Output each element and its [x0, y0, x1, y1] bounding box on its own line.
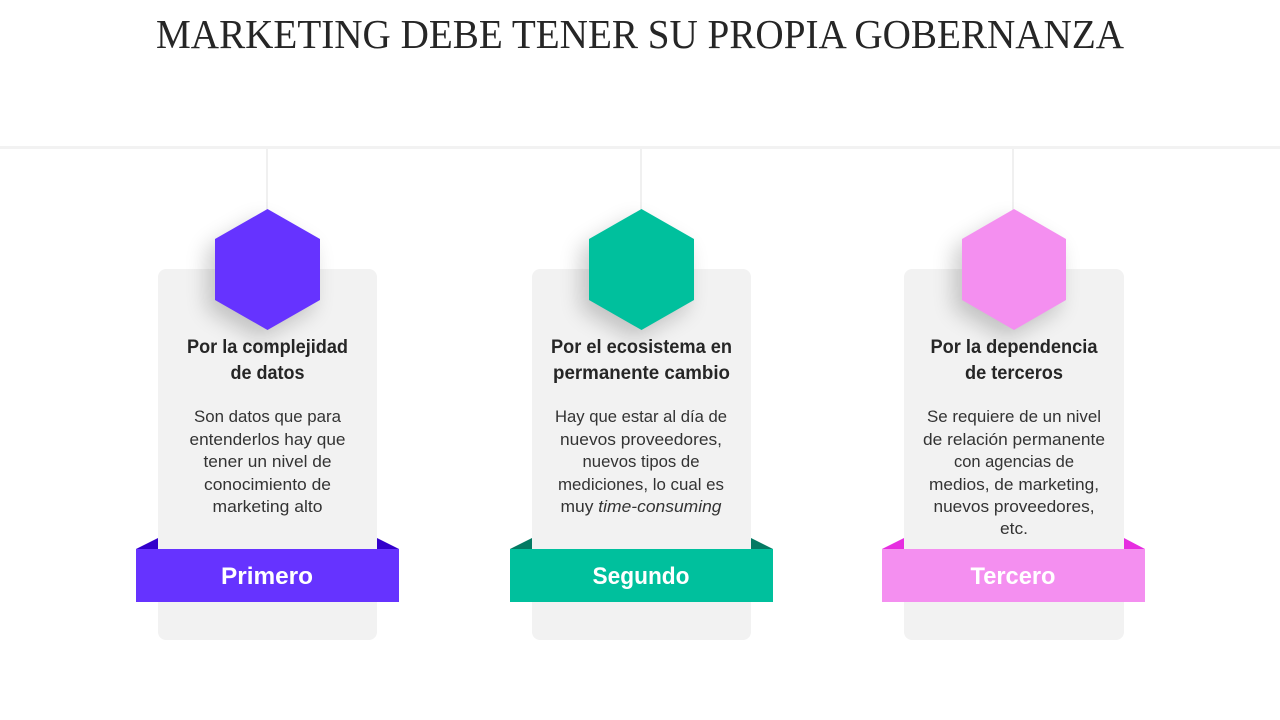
ribbon label: Primero	[221, 563, 313, 590]
body text: medios, de marketing,	[929, 475, 1099, 494]
panel: primero	[136, 209, 399, 640]
body text: Se requiere de un nivel	[927, 407, 1101, 426]
body text: conocimiento de	[204, 475, 331, 494]
ribbon label: Segundo	[592, 563, 690, 590]
heading: Por la dependencia	[930, 337, 1098, 358]
body text: nuevos proveedores,	[934, 497, 1094, 516]
body text: nuevos tipos de	[582, 452, 700, 471]
title: MARKETING DEBE TENER SU PROPIA GOBERNANZA	[156, 11, 1124, 57]
hexagon shadow	[954, 219, 1059, 339]
body text: con agencias de	[954, 452, 1074, 471]
card background	[158, 269, 377, 640]
heading: Por la complejidad	[187, 337, 348, 358]
ribbon folds	[510, 538, 532, 549]
heading: de terceros	[965, 363, 1063, 384]
ribbon label: Tercero	[970, 563, 1056, 590]
body text: marketing alto	[212, 497, 322, 516]
hexagon shadow	[207, 219, 313, 339]
panel: tercero	[882, 209, 1145, 640]
icon: hexagon	[962, 209, 1066, 330]
body text: entenderlos hay que	[190, 430, 346, 449]
card background	[532, 269, 751, 640]
body text: tener un nivel de	[204, 452, 332, 471]
panel: segundo	[510, 209, 773, 640]
ribbon folds	[882, 538, 904, 549]
body text: mediciones, lo cual es	[558, 475, 724, 494]
heading: Por el ecosistema en	[551, 337, 732, 358]
body text: Son datos que para	[194, 407, 342, 426]
ribbon folds	[136, 538, 158, 549]
card background	[904, 269, 1124, 640]
ribbon	[510, 549, 773, 602]
body text: nuevos proveedores,	[560, 430, 722, 449]
body text: etc.	[1000, 519, 1028, 538]
ribbon	[882, 549, 1145, 602]
heading: permanente cambio	[553, 363, 730, 384]
icon: hexagon	[215, 209, 320, 330]
icon: hexagon	[589, 209, 694, 330]
body text: Hay que estar al día de	[555, 407, 727, 426]
body text: de relación permanente	[923, 430, 1105, 449]
body text: muy time-consuming	[560, 497, 718, 516]
ribbon	[136, 549, 399, 602]
hexagon shadow	[581, 219, 687, 339]
heading: de datos	[230, 363, 304, 384]
